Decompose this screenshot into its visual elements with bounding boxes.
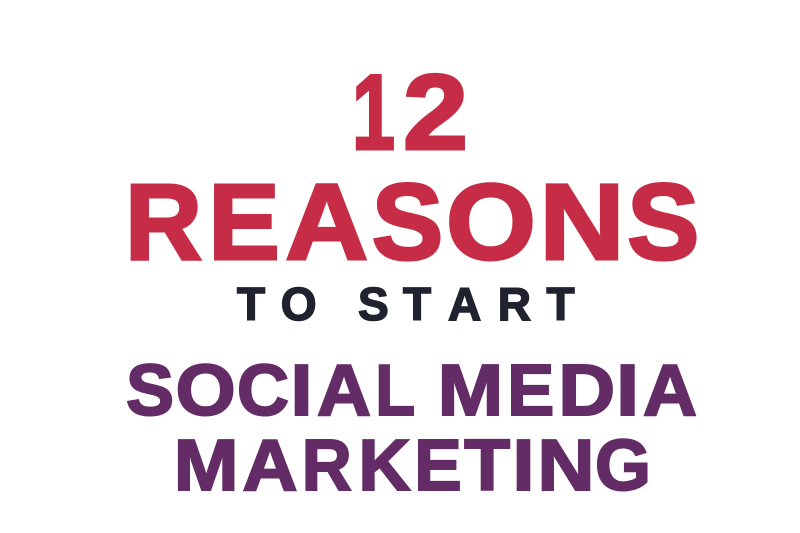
title line: SOCIAL MEDIA: D [558,351,615,431]
title line: REASONS: E [208,161,280,282]
title line: MARKETING: I [512,426,534,506]
title line: REASONS: A [285,161,368,282]
title line: REASONS: N [540,161,624,282]
title line: SOCIAL MEDIA: I [616,351,639,431]
title line: MARKETING: T [464,426,510,506]
title line: MARKETING: N [538,426,594,506]
title line: REASONS: S [627,161,699,282]
title line: MARKETING: K [358,426,410,506]
title line: REASONS: O [446,161,536,282]
title line: SOCIAL MEDIA: O [176,351,236,431]
title line: MARKETING: A [242,426,298,506]
title line: REASONS: S [372,161,443,282]
title line: SOCIAL MEDIA: L [375,351,414,431]
title line: 12: 1 [352,52,395,172]
title line: MARKETING: R [302,426,352,506]
title line: REASONS: R [125,161,202,282]
title line: 12: 2 [403,52,468,172]
title line: SOCIAL MEDIA: M [438,351,503,431]
title line: SOCIAL MEDIA: I [290,351,312,431]
title line: SOCIAL MEDIA: S [126,351,174,431]
title line: SOCIAL MEDIA: A [317,351,371,431]
title line: MARKETING: G [595,426,651,506]
title line: SOCIAL MEDIA: A [643,351,697,431]
title line: MARKETING: M [174,426,239,506]
subtitle: TO START: TO START [237,278,575,330]
title line: SOCIAL MEDIA: C [237,351,289,431]
title line: SOCIAL MEDIA: E [507,351,554,431]
title line: MARKETING: E [414,426,462,506]
